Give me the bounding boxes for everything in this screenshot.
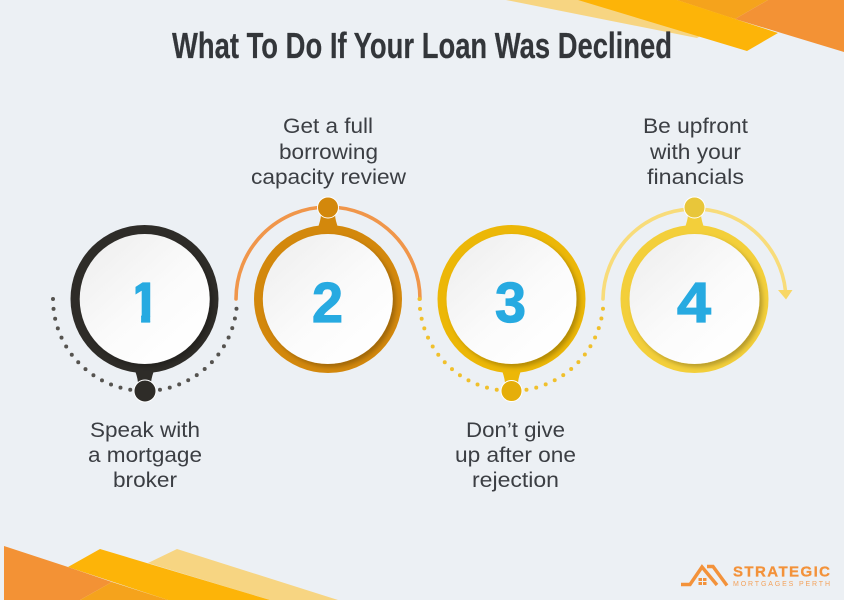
label: step 2: borrowing [279, 141, 378, 164]
number 1: 1 [129, 271, 161, 335]
icon: house roof [681, 566, 727, 586]
label: step 1: broker [113, 469, 177, 492]
step 1 circle [70, 225, 218, 402]
logo tagline: MORTGAGES PERTH [733, 581, 830, 588]
label: step 4: financials [647, 166, 744, 189]
label: step 1: a mortgage [88, 444, 202, 467]
arc: step 2 [236, 207, 420, 299]
step 4 circle [620, 197, 768, 373]
number 3: 3 [495, 271, 526, 335]
number 2: 2 [312, 271, 343, 335]
arrow arc: step 4 [603, 209, 792, 300]
label: step 4: Be upfront [643, 115, 748, 138]
step 2 circle [254, 197, 402, 373]
logo [681, 564, 830, 588]
step 3 circle [438, 225, 586, 402]
label: step 3: up after one [455, 444, 576, 467]
label: step 4: with your [649, 141, 741, 164]
bottom left decorative corner [4, 546, 338, 600]
label: step 2 [251, 115, 407, 189]
label: step 3: rejection [472, 469, 559, 492]
number 4: 4 [677, 271, 711, 335]
dotted arc: step 1 [53, 299, 237, 391]
label: step 3 [455, 419, 576, 492]
top right decorative corner [506, 0, 844, 52]
label: step 2: Get a full [283, 115, 373, 138]
label: step 1 [88, 419, 202, 492]
label: step 1: Speak with [90, 419, 200, 442]
label: step 2: capacity review [251, 166, 407, 189]
dotted arc: step 3 [420, 299, 604, 391]
title: What To Do If Your Loan Was Declined [172, 25, 672, 66]
label: step 4 [643, 115, 748, 189]
logo wordmark: STRATEGIC [733, 564, 830, 580]
label: step 3: Don’t give [466, 419, 565, 442]
